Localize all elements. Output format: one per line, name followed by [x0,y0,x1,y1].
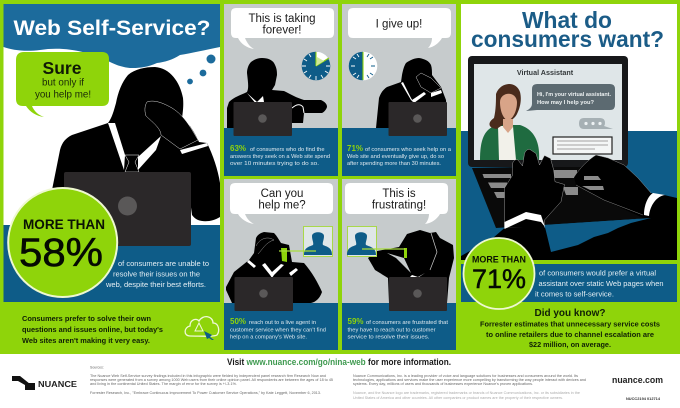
speech bubble: Can you [261,188,303,200]
company text: systems. Every day, millions of users and thousands of businesses experience Nuance's proven applications. [353,382,533,386]
silhouette: man checking watch [227,58,327,128]
chat bubble: How may I help you? [537,100,594,106]
sources text: The Nuance Web Self-Service survey findings included in this infographic were fielded by independent panel research firm Research Now and [90,374,326,378]
callout text: Web sites aren't making it very easy. [22,336,150,345]
speech bubble: Sure [43,58,82,78]
connection line [279,250,316,252]
panel: what do consumers want [461,4,677,349]
speech bubble [16,52,109,117]
stat text [348,317,448,340]
stat text: 63% [230,144,246,153]
stat text: 71% [347,144,363,153]
laptop [64,172,191,246]
did you know: $22 million, on average. [529,342,611,349]
stat text: of consumers who seek help on a [365,147,452,153]
speech bubble: forever! [262,24,302,36]
connection line [362,248,405,250]
blue wedge [544,218,651,252]
typing bubble [579,118,613,129]
stat text: help on a company's Web site. [230,334,307,340]
blue band [224,303,338,350]
thought bubbles [187,54,216,84]
did you know: Forrester estimates that unnecessary service costs [480,322,660,328]
panel: web self-service [4,4,220,345]
icon: clock [302,52,330,80]
silhouette: man with head on hand [376,58,447,128]
chat bubble: Hi, I'm your virtual assistant. [537,92,611,98]
speech bubble: frustrating! [372,200,426,212]
speech bubble: but only if [42,78,84,88]
nuance logo: NUANCE [38,379,77,389]
stat text: over 10 minutes trying to do so. [230,161,319,167]
stat text: reach out to a live agent in [249,320,316,326]
right cuff [644,193,665,216]
company text: Nuance Communications, Inc. is a leading provider of voice and language solutions for businesses and consumers around the world. Its [353,374,578,378]
agent icon box [304,226,332,256]
sources text: responses were generated from a survey among 1000 Web users from their online opinion panel. All respondents are between the ages of 18 to 45 [90,378,333,382]
stat description: of consumers are unable to [118,259,209,268]
stat text: after spending more than 30 minutes. [347,161,441,167]
blue band [4,225,220,302]
laptop [234,102,292,136]
speech bubble [230,183,333,224]
heading cloud [4,4,220,68]
stat description: it comes to self-service. [535,292,614,298]
laptop [234,277,293,311]
stat text: of consumers are frustrated that [366,320,448,326]
title [471,7,664,52]
title: Web Self-Service? [14,16,210,40]
laptop [388,102,447,136]
blue stat band [461,264,677,302]
stat circle: 71%: 71% [472,264,526,294]
stat circle: 58%: MORE THAN [23,217,105,232]
stat text: of consumers who do find the [250,147,324,153]
stat text: they have to reach out to customer [348,328,436,334]
stat text [230,144,330,167]
stat circle: 71% [464,238,534,309]
speech bubble: you help me! [35,90,91,100]
icon: clock [349,52,377,80]
panel: I give up [342,4,456,176]
stat circle: 71%: MORE THAN [472,254,526,264]
stat text [347,144,452,167]
company text: Nuance, and the Nuance logo are trademarks, registered trademarks or brands of Nuance Communications, Inc. or its subsidiaries in the [353,391,580,395]
input box [553,137,612,154]
panel: this is taking forever [224,4,338,176]
right hand and sleeve [461,155,677,260]
stat text: 59% [348,317,364,326]
stat circle: 58% [8,188,117,297]
title: What do [522,7,612,33]
website: nuance.com [612,375,663,386]
speech bubble: help me? [258,200,306,212]
company text [353,374,586,400]
speech bubble [231,8,334,49]
stat circle: 58%: 58% [19,231,103,275]
blue band [342,303,456,350]
silhouette: man on phone [226,232,322,303]
virtual assistant avatar [480,84,539,160]
panel: this is frustrating [342,179,456,350]
laptop [389,277,447,311]
laptop screen [468,56,628,167]
stat description: web, despite their best efforts. [105,280,206,289]
callout text [22,314,163,345]
stat text: answers they seek on a Web site spend [230,154,330,160]
chat bubble [526,84,615,111]
did you know [480,308,660,349]
stat description [105,259,209,289]
title: consumers want? [471,26,664,52]
sources text [90,366,333,395]
sources text: and living in the continental United States. The margin of error for the survey is +/-3.1%. [90,382,237,386]
nuance logo [12,376,77,390]
speech bubble [348,8,451,48]
label: virtual assistant: Virtual Assistant [517,68,574,77]
speech bubble: This is [382,188,416,200]
stat text: Web site and eventually give up, do so [347,154,444,160]
did you know: to online retailers due to channel escalation are [486,332,654,339]
footer [12,357,663,401]
silhouette: man with hands behind head [368,230,454,303]
speech bubble [345,183,448,224]
stat description: resolve their issues on the [113,270,200,278]
document code: NUCC2194 012714 [626,397,660,401]
callout text: Consumers prefer to solve their own [22,314,151,323]
stat text: service to resolve their issues. [348,334,430,340]
speech bubble: This is taking [248,13,316,25]
did you know: Did you know? [534,308,606,319]
stat text: 50% [230,317,246,326]
visit line: Visit www.nuance.com/go/nina-web for more information. [227,357,451,368]
keyboard [472,165,651,228]
silhouette: hands on keyboard [461,149,677,260]
stat description: of consumers would prefer a virtual [539,270,656,278]
left cuff [504,212,545,229]
stat text: customer service when they can't find [230,328,326,334]
sources text: Sources: [90,366,104,370]
agent icon box [347,226,376,256]
company text: United States of America and other countries. All other companies or product names are the property of their respective owners. [353,396,563,400]
stat description: assistant over static Web pages when [538,281,664,288]
panel: can you help me [224,179,338,350]
silhouette: man with head in hand [52,67,220,221]
blue band [342,128,456,176]
icon: cloud warning [185,317,219,340]
stat description [535,270,664,298]
left hand [504,149,564,228]
speech bubble: I give up! [376,18,422,30]
callout text: questions and issues online, but today's [22,325,163,334]
blue band [224,128,338,176]
company text: technologies, applications and services make the user experience more compelling by transforming the way people interact with devices and [353,378,586,382]
stat text [230,317,326,340]
sources text: Forrester Research, Inc., "Embrace Continuous Improvement To Power Customer Service Operations," by Kate Leggett, November 6, 2013. [90,391,321,395]
